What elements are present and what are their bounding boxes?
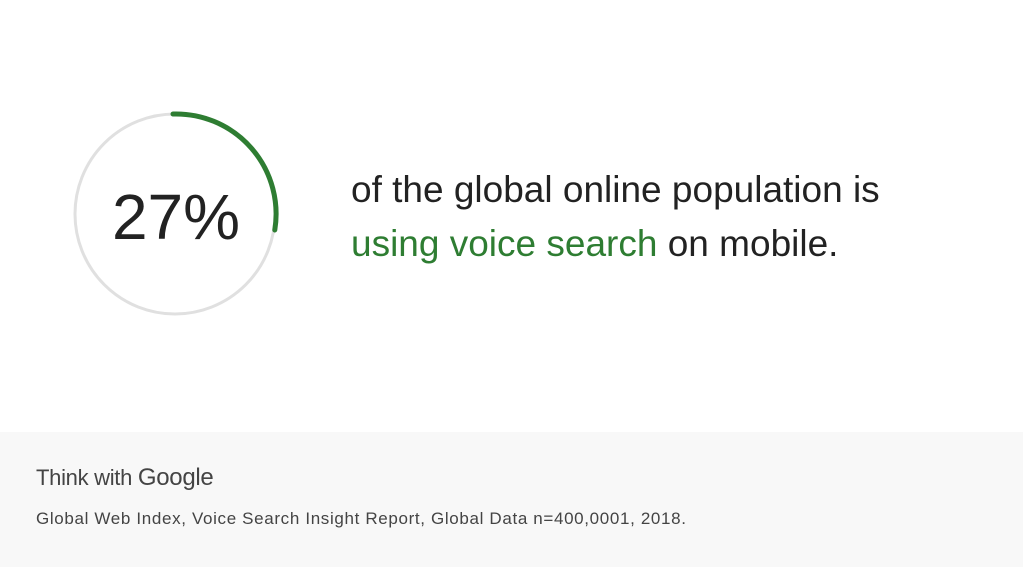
footer band <box>0 432 1023 567</box>
percentage label: 27% <box>112 181 240 253</box>
statement text <box>351 169 880 264</box>
logo: Think with Google: Think with Google <box>36 464 213 491</box>
green progress arc <box>173 114 276 230</box>
statement text: using voice search on mobile. <box>351 223 838 264</box>
donut chart: 27% <box>74 112 279 316</box>
statement text: of the global online population is <box>351 169 880 210</box>
source citation: Global Web Index, Voice Search Insight Report, Global Data n=400,0001, 2018. <box>36 509 687 528</box>
